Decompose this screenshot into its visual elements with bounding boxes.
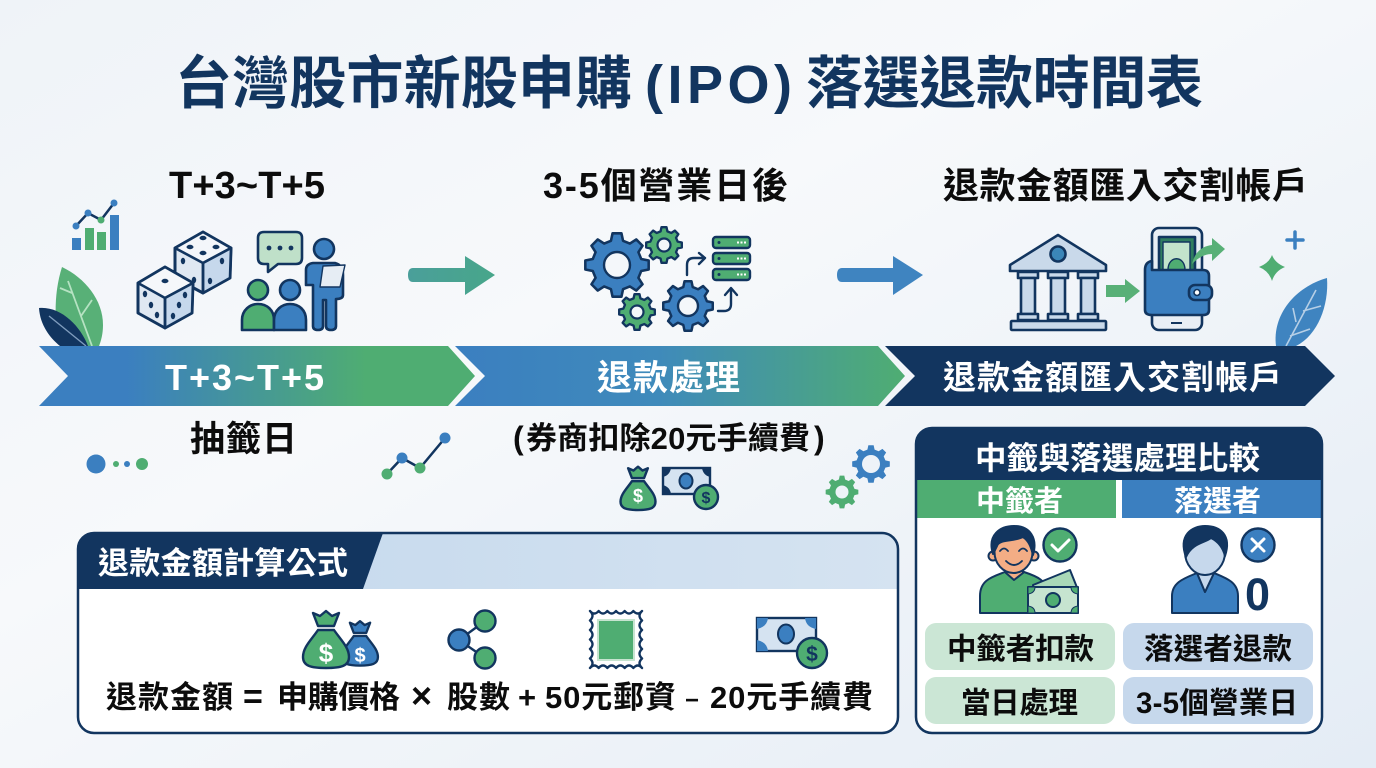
formula text: − — [685, 687, 699, 714]
loser refund box: 落選者退款 — [1144, 633, 1292, 666]
icon: money bag and bill: $ — [702, 490, 711, 507]
icon: front die — [138, 267, 193, 328]
column header: winner — [917, 480, 1116, 518]
formula text: = — [243, 678, 263, 716]
zero amount: 0 — [1245, 569, 1270, 620]
icon: money bags: $ — [354, 645, 366, 667]
step 1 heading: T+3~T+5 — [169, 165, 325, 207]
winner timing box — [925, 677, 1115, 724]
formula text: 退款金額 — [106, 680, 233, 715]
panel: refund formula — [78, 533, 898, 733]
ribbon label 3: 退款金額匯入交割帳戶 — [943, 359, 1282, 396]
icon: check badge — [1044, 528, 1076, 562]
icon: bank — [1010, 235, 1106, 330]
broker fee note: ( — [513, 420, 524, 456]
column header: loser — [1122, 480, 1321, 518]
icon: money bags: $ — [319, 638, 334, 668]
icon: small bar and line chart — [72, 200, 119, 250]
formula heading: 退款金額計算公式 — [98, 546, 348, 581]
icon: back die — [175, 232, 231, 293]
icon: phone wallet with cash — [1145, 228, 1225, 330]
column header: loser: 落選者 — [1174, 485, 1261, 518]
icon: plus — [1287, 232, 1303, 248]
title: (IPO) — [645, 55, 792, 115]
icon: bill and coin — [757, 618, 827, 668]
panel: winner vs loser comparison — [916, 428, 1322, 733]
loser refund box — [1123, 623, 1313, 670]
winner deduction box: 中籤者扣款 — [947, 633, 1094, 666]
decorative gears — [826, 445, 890, 508]
icon: sparkle star — [1259, 255, 1285, 281]
icon: money bag and bill — [621, 467, 718, 510]
icon: faceless loser — [1172, 526, 1238, 613]
ribbon segment 2 — [455, 346, 905, 406]
formula text: + — [518, 680, 536, 715]
formula text: 50元郵資 — [545, 680, 676, 715]
arrow: step 2 to step 3 — [837, 256, 923, 295]
title: 台灣股市新股申購 — [175, 52, 632, 116]
winner timing box: 當日處理 — [961, 687, 1078, 720]
step 2 heading: 3-5個營業日後 — [543, 165, 788, 206]
ribbon segment 1 — [39, 346, 475, 406]
formula text: 股數 — [447, 680, 510, 715]
title — [175, 52, 1203, 116]
ribbon label 2: 退款處理 — [597, 359, 740, 398]
formula text: 申購價格 — [277, 680, 400, 715]
formula text: × — [411, 675, 432, 716]
formula text — [106, 675, 873, 716]
icon: bill and coin: $ — [806, 643, 818, 666]
title: 落選退款時間表 — [806, 52, 1203, 116]
winner deduction box — [925, 623, 1115, 670]
icon: share nodes — [448, 610, 496, 668]
icon: postage stamp — [590, 611, 642, 668]
column header: winner: 中籤者 — [976, 485, 1063, 518]
icon: money bags — [303, 611, 378, 668]
icon: happy winner with cash — [980, 526, 1078, 613]
broker fee note: 券商扣除20元手續費 — [526, 421, 810, 456]
loser timing box — [1123, 677, 1313, 724]
lottery day label: 抽籤日 — [190, 420, 297, 459]
decorative dots — [86, 454, 148, 474]
decorative line chart — [382, 432, 450, 480]
broker fee note: ) — [814, 420, 825, 456]
arrow: bank to wallet — [1106, 279, 1140, 303]
comparison heading: 中籤與落選處理比較 — [975, 440, 1260, 476]
arrow: step 1 to step 2 — [408, 256, 495, 295]
icon: right leaf — [1276, 278, 1327, 346]
icon: money bag and bill: $ — [633, 486, 643, 506]
step 3 heading: 退款金額匯入交割帳戶 — [943, 165, 1308, 206]
formula text: 20元手續費 — [710, 680, 873, 715]
icon: left leaves — [39, 267, 103, 346]
icon: discussion group with presenter — [242, 232, 345, 330]
loser timing box: 3-5個營業日 — [1136, 687, 1298, 720]
icon: cross badge — [1242, 528, 1274, 562]
ribbon label 1: T+3~T+5 — [165, 357, 324, 398]
icon: gears and server — [585, 227, 750, 331]
ribbon segment 3 — [885, 346, 1335, 406]
